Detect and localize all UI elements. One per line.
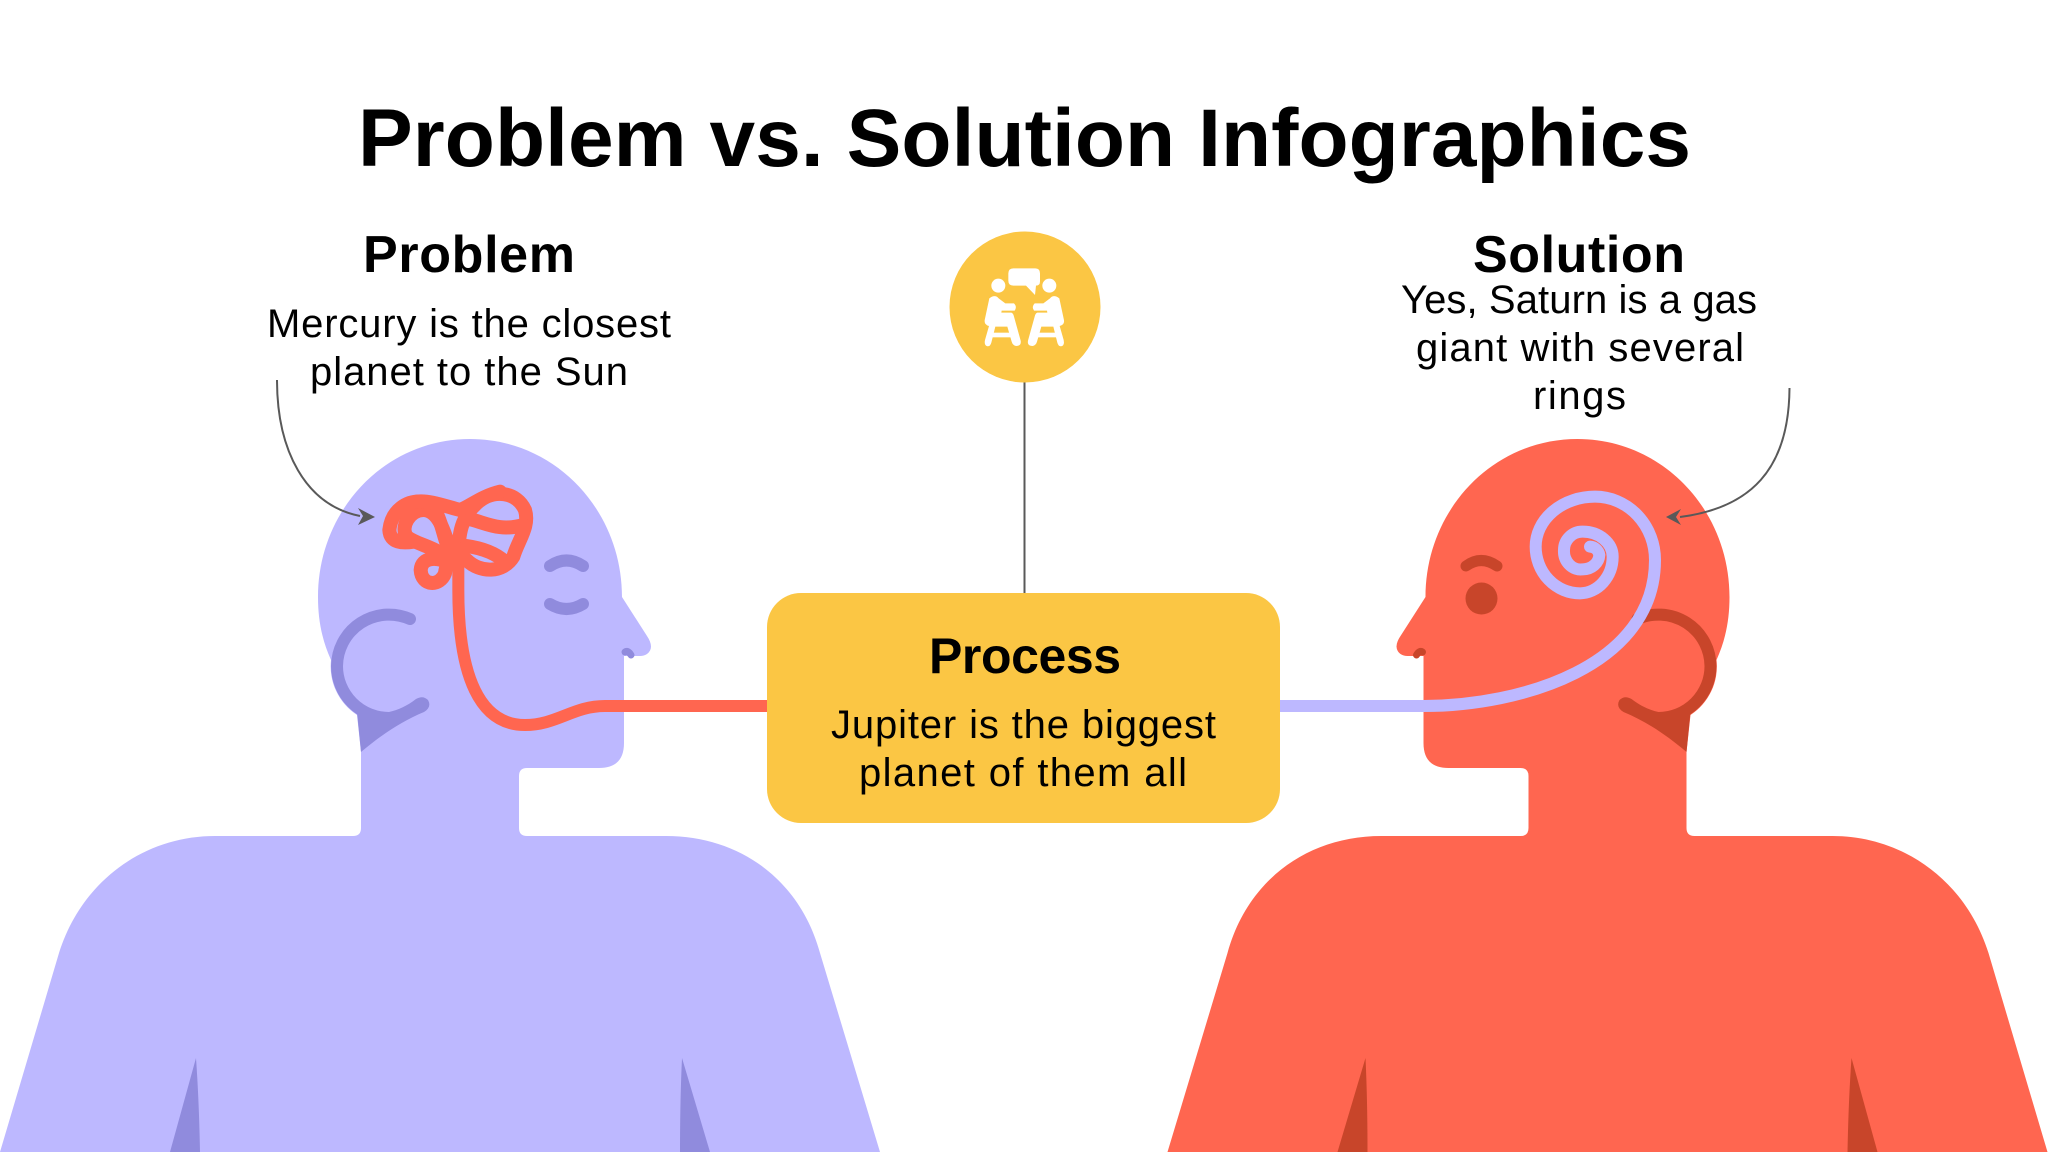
connector line — [1024, 380, 1026, 594]
eyes — [550, 560, 583, 609]
solution text: rings — [1533, 374, 1626, 418]
problem text: Mercury is the closest — [267, 302, 671, 346]
silhouette — [1168, 439, 2048, 1152]
solution arrow — [1666, 388, 1790, 525]
process text — [831, 703, 1216, 795]
process text: Jupiter is the biggest — [831, 703, 1216, 747]
spiral thought line — [1280, 497, 1655, 706]
title: Problem vs. Solution Infographics — [358, 93, 1691, 184]
solution text: giant with several — [1416, 326, 1744, 370]
problem text — [267, 302, 671, 394]
solution text: Yes, Saturn is a gas — [1401, 278, 1757, 322]
armpit shadows — [170, 1058, 710, 1152]
problem heading: Problem — [363, 226, 575, 284]
process text: planet of them all — [859, 751, 1187, 795]
tangled thought line — [389, 492, 768, 725]
problem arrow — [277, 380, 375, 525]
process heading: Process — [929, 628, 1121, 684]
panel: process — [767, 593, 1280, 823]
eye — [1466, 582, 1498, 614]
problem text: planet to the Sun — [310, 350, 628, 394]
ear — [1618, 615, 1710, 752]
solution heading: Solution — [1473, 226, 1685, 284]
armpit shadows — [1338, 1058, 1878, 1152]
silhouette — [0, 439, 880, 1152]
solution text — [1401, 278, 1757, 418]
nostril — [1416, 651, 1422, 655]
ear — [337, 615, 429, 752]
eyebrow — [1466, 560, 1497, 566]
figure: solution person — [1168, 439, 2048, 1152]
figure: problem person — [0, 439, 880, 1152]
icon: two people talking — [950, 232, 1100, 382]
nostril — [625, 651, 631, 655]
